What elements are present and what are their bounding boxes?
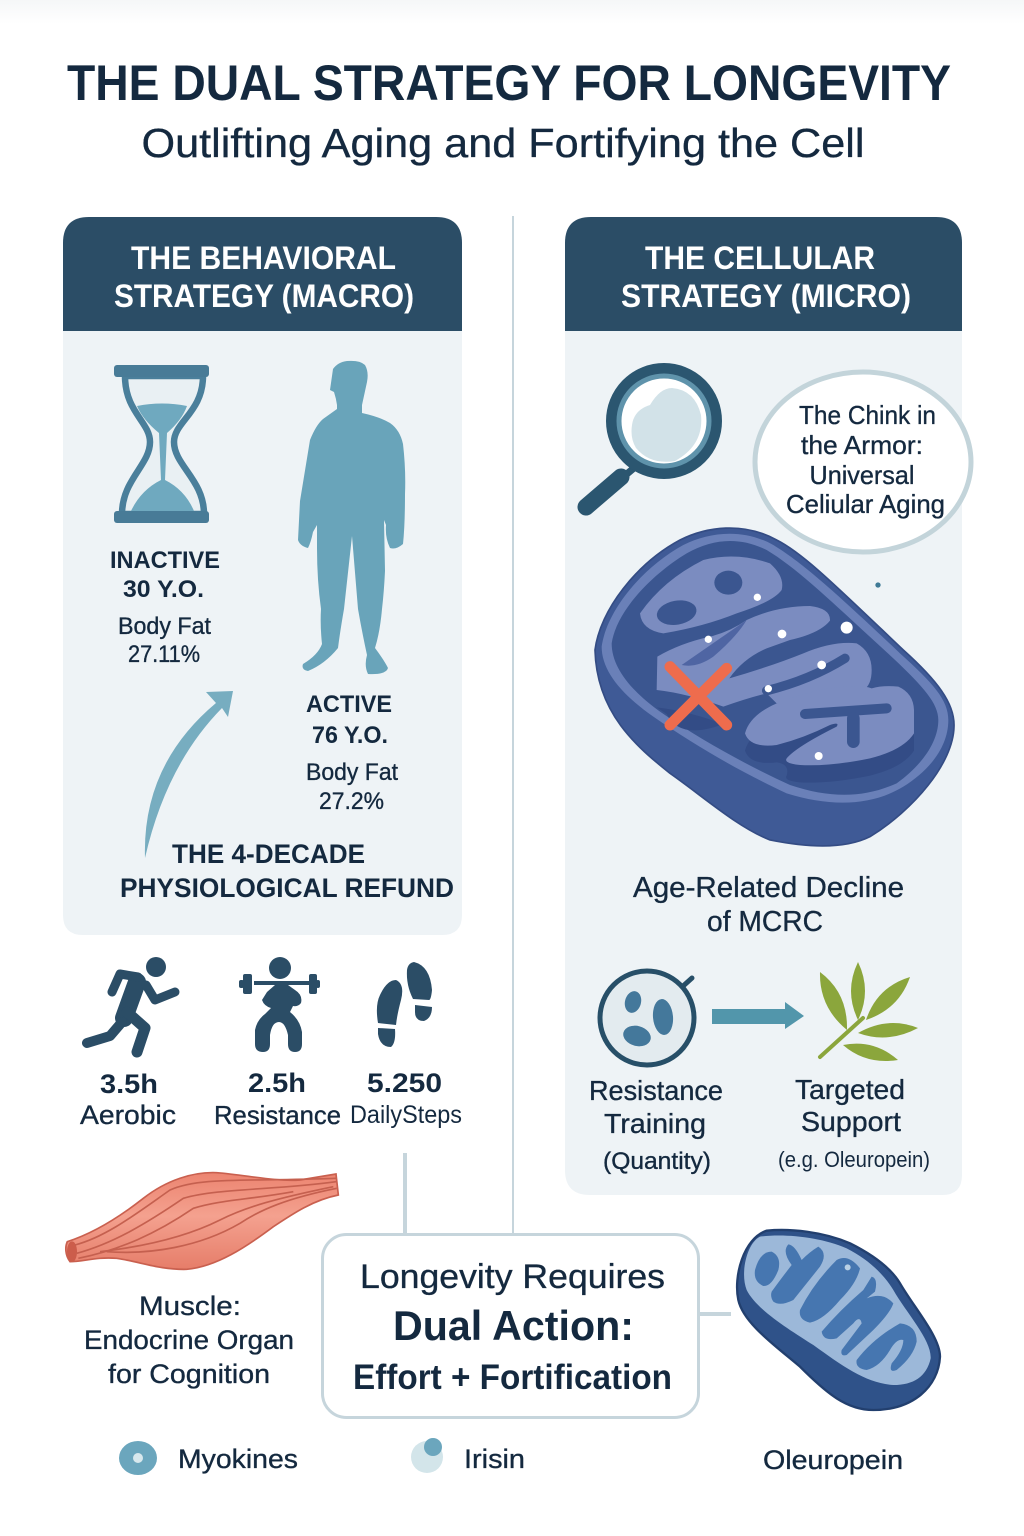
- mitochondrion caption: of MCRC: [707, 906, 823, 938]
- legend: irisin: Irisin: [464, 1444, 525, 1474]
- mitochondrion caption: [633, 872, 904, 938]
- callout: speech bubble: Universal: [810, 460, 914, 490]
- targeted support label: Targeted: [795, 1074, 905, 1105]
- muscle label: Endocrine Organ: [84, 1325, 294, 1355]
- legend: myokines: Myokines: [178, 1444, 298, 1474]
- icon: hourglass: [114, 365, 209, 523]
- callout: speech bubble: The Chink in: [799, 400, 936, 430]
- cristae shadow: [657, 703, 914, 783]
- icon: olive branch: [820, 962, 918, 1061]
- panel header: THE BEHAVIORAL: [131, 240, 396, 276]
- active label: 27.2%: [319, 788, 384, 815]
- icon: large mitochondrion: [595, 528, 954, 846]
- icon: human silhouette: [298, 361, 405, 674]
- inactive label: Body Fat: [118, 613, 211, 640]
- muscle label: [84, 1291, 294, 1389]
- muscle label: for Cognition: [108, 1359, 270, 1389]
- active label: 76 Y.O.: [312, 722, 388, 749]
- stat: daily steps: [350, 1068, 462, 1129]
- refund caption: [120, 839, 454, 903]
- callout: dual action box: Dual Action:: [393, 1302, 634, 1349]
- panel header: STRATEGY (MACRO): [114, 278, 414, 314]
- arrow: to targeted support: [712, 1002, 804, 1029]
- panel: behavioral strategy: [63, 217, 462, 935]
- title: [67, 55, 951, 166]
- inactive label: INACTIVE: [110, 547, 220, 574]
- targeted support label: [778, 1074, 930, 1172]
- stat: resistance: [214, 1068, 341, 1130]
- icon: magnifying glass: [586, 369, 716, 507]
- title: Outlifting Aging and Fortifying the Cell: [142, 120, 864, 166]
- panel body: [565, 320, 962, 1195]
- stat: daily steps: DailySteps: [350, 1101, 462, 1129]
- inactive label: 30 Y.O.: [123, 576, 204, 603]
- stat: aerobic: Aerobic: [80, 1100, 176, 1130]
- stat: aerobic: 3.5h: [100, 1069, 158, 1099]
- cristae folds: [640, 557, 914, 765]
- resistance training label: Training: [604, 1108, 706, 1139]
- icon: small mitochondrion: [737, 1230, 940, 1410]
- refund caption: PHYSIOLOGICAL REFUND: [120, 873, 454, 903]
- panel header: [565, 217, 962, 331]
- white dots: [705, 594, 853, 760]
- resistance training label: [589, 1075, 723, 1175]
- panel header: [63, 217, 462, 331]
- arrow: curved upward: [145, 691, 233, 858]
- panel header: STRATEGY (MICRO): [621, 278, 911, 314]
- mitochondrion caption: Age-Related Decline: [633, 872, 904, 904]
- icon: muscle: [66, 1173, 338, 1269]
- panel body: [63, 320, 462, 935]
- legend: irisin: [411, 1438, 525, 1474]
- callout: dual action box: Effort + Fortification: [353, 1358, 672, 1397]
- icon: red cross: [670, 667, 727, 725]
- refund caption: THE 4-DECADE: [172, 839, 365, 869]
- callout: dual action box: Longevity Requires: [360, 1258, 665, 1296]
- panel: cellular strategy: [565, 217, 971, 1195]
- callout: speech bubble: [755, 372, 971, 552]
- muscle label: Muscle:: [139, 1291, 241, 1321]
- legend: myokines: [119, 1441, 298, 1475]
- icon: runner: [87, 957, 175, 1052]
- icon: footprints: [377, 962, 432, 1047]
- callout: dual action box: [322, 1234, 698, 1418]
- icon: weightlifter: [239, 957, 320, 1052]
- active label: [306, 691, 398, 815]
- legend: oleuropein: Oleuropein: [763, 1445, 903, 1475]
- active label: Body Fat: [306, 759, 398, 786]
- resistance training label: Resistance: [589, 1075, 723, 1106]
- callout: speech bubble: Celiular Aging: [786, 489, 945, 519]
- title: THE DUAL STRATEGY FOR LONGEVITY: [67, 55, 951, 111]
- active label: ACTIVE: [306, 691, 392, 718]
- icon: cell circle: [600, 971, 694, 1065]
- targeted support label: (e.g. Oleuropein): [778, 1147, 930, 1172]
- stat: daily steps: 5.250: [367, 1068, 442, 1098]
- stat: resistance: Resistance: [214, 1100, 341, 1130]
- central divider and connectors: [403, 216, 731, 1316]
- stat: resistance: 2.5h: [248, 1068, 306, 1098]
- callout: speech bubble: the Armor:: [801, 430, 923, 460]
- inactive label: [110, 547, 220, 668]
- resistance training label: (Quantity): [603, 1148, 711, 1175]
- targeted support label: Support: [801, 1106, 901, 1137]
- stat: aerobic: [80, 1069, 176, 1130]
- inactive label: 27.11%: [128, 641, 200, 668]
- panel header: THE CELLULAR: [645, 240, 875, 276]
